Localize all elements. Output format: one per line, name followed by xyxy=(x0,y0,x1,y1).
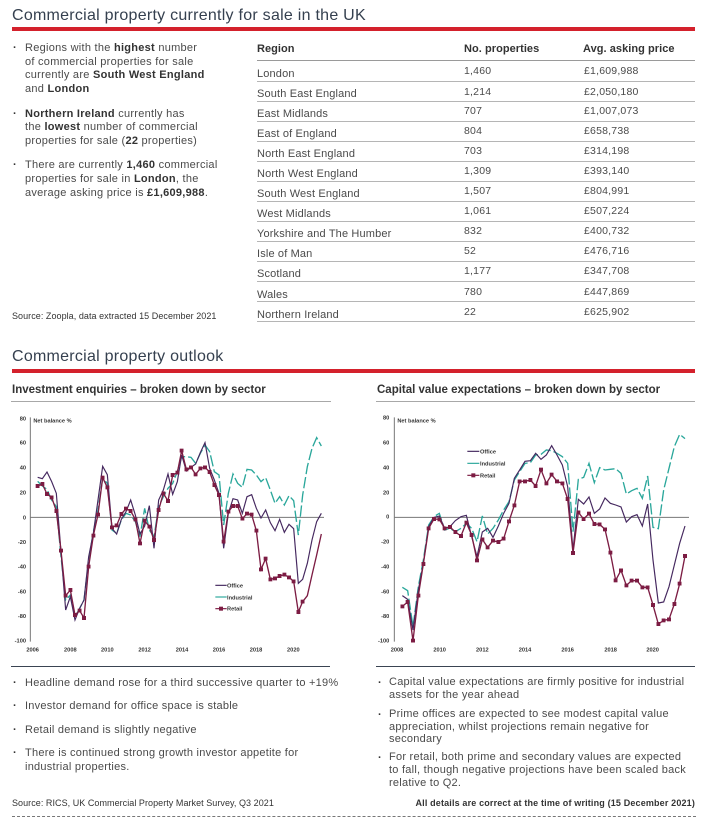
y axis labels: -60 xyxy=(18,589,26,595)
text block: investment takeaways: · xyxy=(13,700,17,712)
bullet: London: There are currently 1,460 commercial xyxy=(25,159,218,171)
bullet: lowest: the lowest number of commercial xyxy=(25,121,198,133)
row: Northern Ireland: £625,902 xyxy=(584,306,629,318)
bullet: highest: · xyxy=(13,42,17,54)
bullet: London xyxy=(13,159,218,199)
legend: Office xyxy=(227,584,243,590)
bullet: retail values xyxy=(389,751,686,789)
row: East of England xyxy=(257,122,695,142)
table header: Region xyxy=(257,43,295,55)
bullet: retail values: relative to Q2. xyxy=(389,777,461,789)
bullet: headline demand: Headline demand rose for a third successive quarter to +19% xyxy=(25,677,338,689)
y axis labels xyxy=(15,416,26,645)
series: retail xyxy=(38,451,303,618)
bullet: lowest xyxy=(13,108,198,147)
row: East of England: East of England xyxy=(257,128,337,140)
row: West Midlands xyxy=(257,202,695,222)
row: West Midlands: £507,224 xyxy=(584,205,629,217)
bullet: highest: and London xyxy=(25,83,89,95)
bullet: industrial appetite xyxy=(25,747,298,773)
series: industrial xyxy=(402,434,685,627)
row: Isle of Man xyxy=(257,242,695,262)
row: Scotland xyxy=(257,262,695,282)
bullet: prime offices: secondary xyxy=(389,733,442,745)
legend: Retail xyxy=(480,474,496,480)
x axis labels: 2012 xyxy=(138,648,151,654)
x axis labels: 2006 xyxy=(26,648,39,654)
bullet: London: properties for sale in London, the xyxy=(25,173,199,185)
table header: Avg. asking price xyxy=(583,43,675,55)
row: East of England: £658,738 xyxy=(584,125,629,137)
row: West Midlands: 1,061 xyxy=(464,205,491,217)
axis title: Net balance % xyxy=(33,419,72,425)
y axis labels: -100 xyxy=(15,639,26,645)
red heading rule xyxy=(12,27,695,31)
row: Northern Ireland: 22 xyxy=(464,306,476,318)
row: West Midlands: West Midlands xyxy=(257,208,331,220)
row: London: London xyxy=(257,68,295,80)
bullet: retail values: to fall, though negative projections have been scaled back xyxy=(389,764,686,776)
y axis labels: -40 xyxy=(18,565,26,571)
row: Isle of Man: Isle of Man xyxy=(257,248,312,260)
chart heading: capital value expectations: Capital value expectations – broken down by sector xyxy=(377,384,660,396)
row: South East England: £2,050,180 xyxy=(584,86,639,98)
y axis labels: 40 xyxy=(20,465,26,471)
x axis labels xyxy=(391,648,659,654)
legend: Industrial xyxy=(227,595,253,601)
row: Scotland: Scotland xyxy=(257,268,301,280)
row: Wales: Wales xyxy=(257,289,288,301)
row: East Midlands: £1,007,073 xyxy=(584,105,639,117)
row: London xyxy=(257,62,695,82)
y axis labels: 20 xyxy=(20,491,26,497)
row: Northern Ireland: Northern Ireland xyxy=(257,309,339,321)
bullet: lowest: Northern Ireland currently has xyxy=(25,108,185,120)
row: North West England: 1,309 xyxy=(464,165,491,177)
bullet: retail values: For retail, both prime and secondary values are expected xyxy=(389,751,681,763)
heading: commercial property outlook: Commercial property outlook xyxy=(12,348,224,365)
x axis labels: 2016 xyxy=(561,648,574,654)
row: North East England: 703 xyxy=(464,145,482,157)
bullet: industrial appetite: industrial properties. xyxy=(25,761,130,773)
legend: Retail xyxy=(227,607,243,613)
y axis labels: -100 xyxy=(378,639,389,645)
bullet: capital value: assets for the year ahead xyxy=(389,689,519,701)
bullet: highest xyxy=(13,42,205,95)
x axis labels: 2020 xyxy=(287,648,300,654)
source note: Zoopla: Source: Zoopla, data extracted 15 December 2021 xyxy=(12,311,216,321)
y axis labels: -80 xyxy=(381,614,389,620)
y axis labels xyxy=(378,416,389,645)
row: Yorkshire and The Humber xyxy=(257,222,695,242)
text block: investment takeaways: · xyxy=(13,724,17,736)
row: North East England: North East England xyxy=(257,148,355,160)
row: East of England: 804 xyxy=(464,125,482,137)
source note: RICS: Source: RICS, UK Commercial Property Market Survey, Q3 2021 xyxy=(12,798,274,808)
x axis labels: 2010 xyxy=(101,648,114,654)
row: North West England xyxy=(257,162,695,182)
y axis labels: -20 xyxy=(381,539,389,545)
row: South East England: South East England xyxy=(257,88,357,100)
row: North East England: £314,198 xyxy=(584,145,629,157)
row: London: £1,609,988 xyxy=(584,65,639,77)
legend xyxy=(467,450,506,480)
text block: investment takeaways xyxy=(13,677,338,773)
bullet: capital value: Capital value expectations are firmly positive for industrial xyxy=(389,676,684,688)
bullet: prime offices: appreciation, whilst projections remain negative for xyxy=(389,720,649,732)
bullet: highest: Regions with the highest number xyxy=(25,42,197,54)
x axis labels: 2010 xyxy=(433,648,446,654)
bullet: prime offices xyxy=(389,708,669,745)
bullet: prime offices: Prime offices are expected to see modest capital value xyxy=(389,708,669,720)
row: London: 1,460 xyxy=(464,65,491,77)
row: North West England: £393,140 xyxy=(584,165,629,177)
bullet: highest: of commercial properties for sale xyxy=(25,56,193,68)
bullet: capital value xyxy=(389,676,684,701)
axes xyxy=(30,417,324,642)
bullet: lowest: properties for sale (22 properties) xyxy=(25,135,197,147)
series: industrial xyxy=(38,438,321,617)
row: East Midlands xyxy=(257,102,695,122)
text block: capital value takeaways xyxy=(378,676,686,789)
x axis labels: 2012 xyxy=(476,648,489,654)
row: Isle of Man: £476,716 xyxy=(584,245,629,257)
x axis labels: 2014 xyxy=(176,648,189,654)
x axis labels: 2020 xyxy=(646,648,659,654)
heading: commercial property for sale: Commercial property currently for sale in the UK xyxy=(12,7,366,24)
note: date of writing: All details are correct at the time of writing (15 December 2021) xyxy=(416,798,695,808)
text block: key findings xyxy=(13,42,218,199)
row: Yorkshire and The Humber: 832 xyxy=(464,225,482,237)
axis title: Net balance % xyxy=(397,419,436,425)
row: South West England: South West England xyxy=(257,188,360,200)
row: South East England: 1,214 xyxy=(464,86,491,98)
row: Northern Ireland xyxy=(257,302,695,322)
x axis labels: 2008 xyxy=(64,648,77,654)
row: Wales: £447,869 xyxy=(584,286,629,298)
text block: capital value takeaways: · xyxy=(378,677,382,689)
x axis labels: 2018 xyxy=(604,648,617,654)
y axis labels: 20 xyxy=(383,491,389,497)
table: properties by region xyxy=(257,43,695,322)
row: Wales: 780 xyxy=(464,286,482,298)
bullet: London: average asking price is £1,609,988. xyxy=(25,187,208,199)
line chart: investment enquiries xyxy=(14,416,324,654)
chart heading: investment enquiries: Investment enquiries – broken down by sector xyxy=(12,384,266,396)
x axis labels xyxy=(26,648,300,654)
row: Scotland: £347,708 xyxy=(584,265,629,277)
text block: investment takeaways: · xyxy=(13,677,17,689)
y axis labels: -60 xyxy=(381,589,389,595)
row: Yorkshire and The Humber: £400,732 xyxy=(584,225,629,237)
row: South West England: 1,507 xyxy=(464,185,491,197)
row: North West England: North West England xyxy=(257,168,358,180)
row: East Midlands: 707 xyxy=(464,105,482,117)
legend xyxy=(215,584,253,613)
axes xyxy=(394,417,689,642)
y axis labels: -80 xyxy=(18,614,26,620)
y axis labels: 40 xyxy=(383,465,389,471)
bullet: industrial appetite: There is continued strong growth investor appetite for xyxy=(25,747,298,759)
row: Isle of Man: 52 xyxy=(464,245,476,257)
series: retail xyxy=(402,470,685,641)
table header xyxy=(257,41,695,61)
y axis labels: 0 xyxy=(23,515,26,521)
bullet: London: · xyxy=(13,159,17,171)
bullet: lowest: · xyxy=(13,108,17,120)
row: South West England: £804,991 xyxy=(584,185,629,197)
y axis labels: 80 xyxy=(20,416,26,422)
red heading rule xyxy=(12,369,695,372)
bullet: office demand: Investor demand for office space is stable xyxy=(25,700,238,712)
x axis labels: 2016 xyxy=(213,648,225,654)
y axis labels: 60 xyxy=(20,441,26,447)
row: Scotland: 1,177 xyxy=(464,265,491,277)
series: office xyxy=(402,446,685,630)
text block: capital value takeaways: · xyxy=(378,752,382,764)
bullet: highest: currently are South West England xyxy=(25,69,205,81)
y axis labels: 0 xyxy=(386,515,389,521)
y axis labels: -40 xyxy=(381,565,389,571)
table header: No. properties xyxy=(464,43,539,55)
y axis labels: -20 xyxy=(18,540,26,546)
y axis labels: 60 xyxy=(383,441,389,447)
row: South West England xyxy=(257,182,695,202)
row: South East England xyxy=(257,82,695,102)
row: East Midlands: East Midlands xyxy=(257,108,328,120)
text block: capital value takeaways: · xyxy=(378,709,382,721)
row: Wales xyxy=(257,282,695,302)
legend: Office xyxy=(480,450,496,456)
x axis labels: 2008 xyxy=(391,648,403,654)
series: office xyxy=(38,443,321,620)
row: North East England xyxy=(257,142,695,162)
y axis labels: 80 xyxy=(383,416,389,422)
bullet: retail demand: Retail demand is slightly negative xyxy=(25,724,197,736)
x axis labels: 2014 xyxy=(519,648,532,654)
row: Yorkshire and The Humber: Yorkshire and The Humber xyxy=(257,228,391,240)
x axis labels: 2018 xyxy=(250,648,262,654)
line chart: capital value expectations xyxy=(378,416,689,654)
legend: Industrial xyxy=(480,462,506,468)
text block: investment takeaways: · xyxy=(13,747,17,759)
